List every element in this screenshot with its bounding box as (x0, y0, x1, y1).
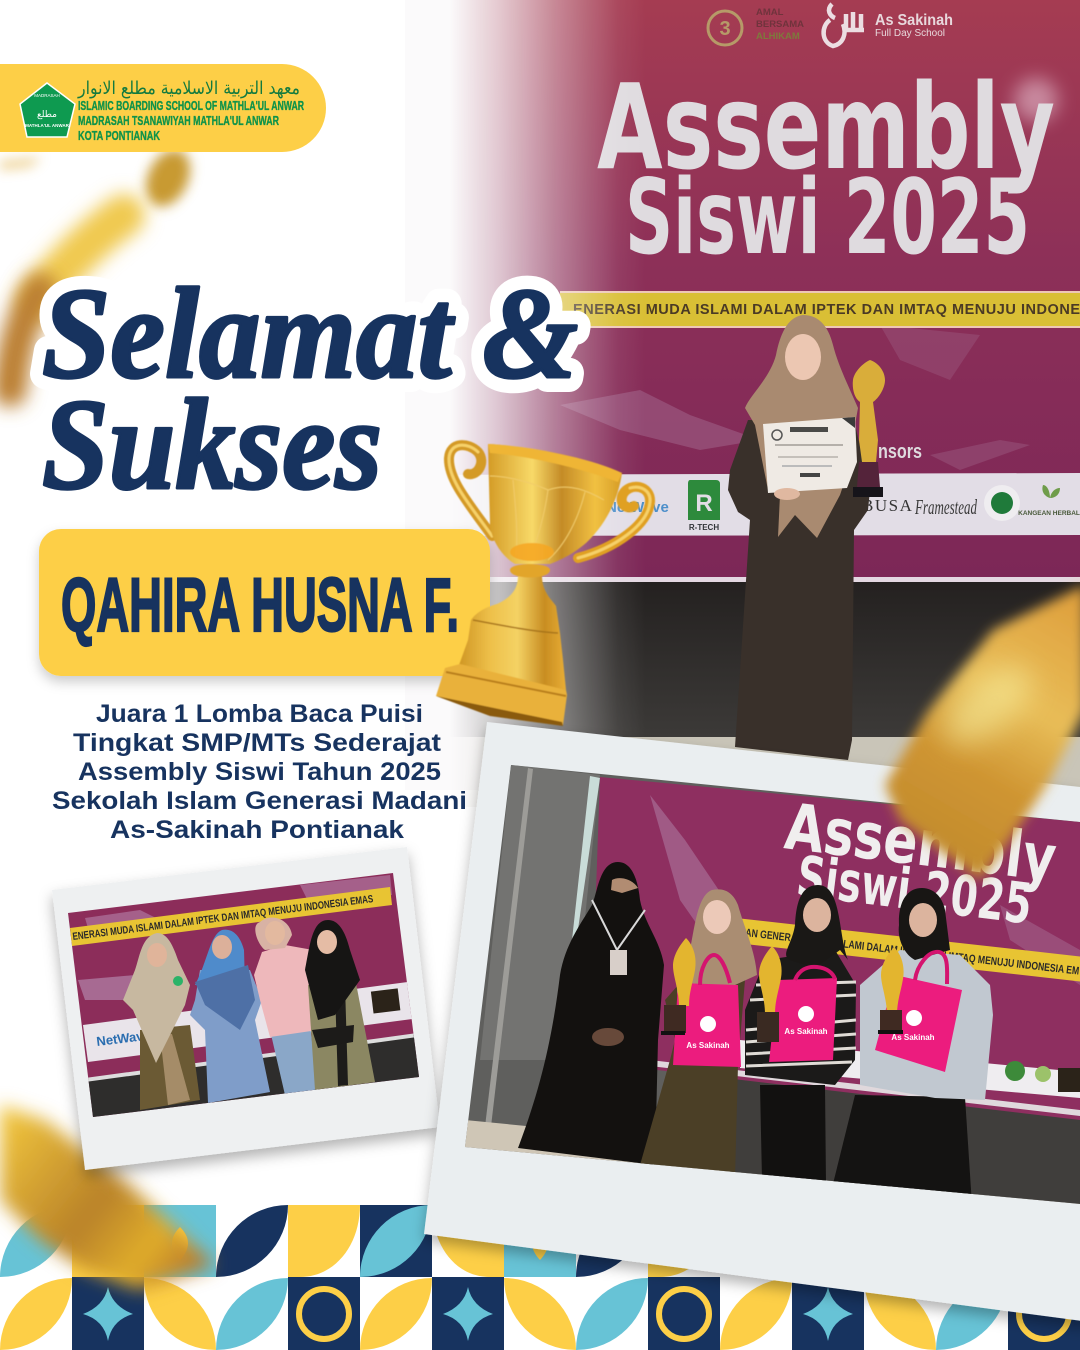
gold trophy (436, 444, 650, 726)
banner heading (597, 78, 1054, 254)
name plate: QAHIRA HUSNA F. (61, 563, 459, 648)
name plate (39, 529, 490, 676)
gold trophies (661, 938, 904, 1042)
title: Selamat & (42, 262, 578, 406)
background stage photo (400, 0, 1080, 807)
small polaroid (52, 847, 440, 1170)
achievement text: Sekolah Islam Generasi Madani (52, 787, 467, 815)
certificate (763, 417, 857, 500)
logo badge: مطلع (37, 110, 57, 120)
school name (77, 78, 304, 143)
person: grey jacket student (829, 888, 993, 1205)
yellow theme strip: ENERASI MUDA ISLAMI DALAM IPTEK DAN IMTAQ MENUJU INDONESIA EMAS (72, 893, 374, 943)
standing student with certificate and trophy (728, 315, 885, 760)
sponsor band: R (695, 490, 713, 517)
sponsor band: KANGEAN HERBAL (1018, 510, 1080, 517)
achievement text (52, 700, 467, 844)
background stage photo: nsors (878, 441, 922, 463)
top sponsor logos (708, 4, 953, 46)
person: pink shirt (254, 918, 318, 1095)
achievement text: Assembly Siswi Tahun 2025 (78, 758, 441, 786)
school name: معهد التربية الاسلامية مطلع الانوار (77, 78, 300, 99)
person: black hijab (305, 920, 375, 1090)
pink goodie bags: As Sakinah (891, 1033, 935, 1042)
large polaroid (424, 722, 1080, 1322)
trophy plinth (436, 664, 567, 725)
school name: KOTA PONTIANAK (78, 128, 160, 143)
person: blue dress (190, 930, 270, 1103)
achievement text: Tingkat SMP/MTs Sederajat (73, 729, 442, 757)
top sponsor logos: Full Day School (875, 28, 945, 39)
sponsor band: Framestead (914, 495, 977, 519)
student trophy (853, 360, 885, 497)
top sponsor logos: 3 (719, 18, 731, 40)
school name: MADRASAH TSANAWIYAH MATHLA'UL ANWAR (78, 113, 279, 128)
person: beige hijab student (640, 889, 757, 1178)
pink goodie bags (673, 952, 962, 1072)
sponsor band: NetWave (606, 499, 669, 516)
person: black niqab (518, 862, 664, 1165)
polaroid frame (52, 847, 440, 1170)
yellow theme strip (560, 291, 1080, 328)
trophy handles (449, 445, 650, 558)
sponsor band: R-TECH (689, 523, 719, 532)
achievement text: As-Sakinah Pontianak (110, 816, 404, 844)
pink goodie bags: As Sakinah (784, 1027, 828, 1036)
top sponsor logos: As Sakinah (875, 12, 953, 29)
polaroid frame (424, 722, 1080, 1322)
award winners photo (440, 760, 1080, 1220)
pattern row 1 (0, 1205, 720, 1277)
school name: ISLAMIC BOARDING SCHOOL OF MATHLA'UL ANWAR (78, 98, 304, 113)
gold ribbon: right (885, 585, 1080, 880)
trophy cup (488, 444, 622, 564)
logo badge (20, 83, 75, 137)
geometric pattern strip (0, 1205, 1080, 1350)
logo strip (740, 1040, 1080, 1098)
sponsor band: BUSA (862, 496, 913, 515)
gold ribbon: top left (0, 142, 199, 390)
top sponsor logos: ALHIKAM (756, 31, 800, 42)
logo bar (0, 64, 326, 152)
group photo of four teachers: NetWave (96, 1027, 151, 1049)
achievement text: Juara 1 Lomba Baca Puisi (96, 700, 423, 728)
pink goodie bags: As Sakinah (686, 1041, 730, 1050)
person: beige hijab (123, 933, 200, 1110)
logo badge: MADRASAH (34, 93, 60, 98)
title: Selamat & (42, 262, 578, 406)
top sponsor logos: AMAL (756, 7, 784, 18)
pattern row 2 (0, 1277, 1080, 1350)
person: striped top student (745, 885, 856, 1185)
yellow theme strip: ENERASI MUDA ISLAMI DALAM IPTEK DAN IMTAQ MENUJU INDONE (573, 302, 1080, 318)
trophy stem and base (458, 576, 566, 690)
gold ribbon: bottom left (0, 1105, 215, 1290)
top sponsor logos: BERSAMA (756, 19, 804, 30)
yellow theme strip (70, 887, 392, 946)
sponsor band (400, 473, 1080, 536)
title (42, 262, 578, 517)
logo badge: MATHLA'UL ANWAR (25, 123, 70, 128)
title: Sukses (42, 373, 382, 517)
group photo of four teachers (68, 873, 419, 1117)
